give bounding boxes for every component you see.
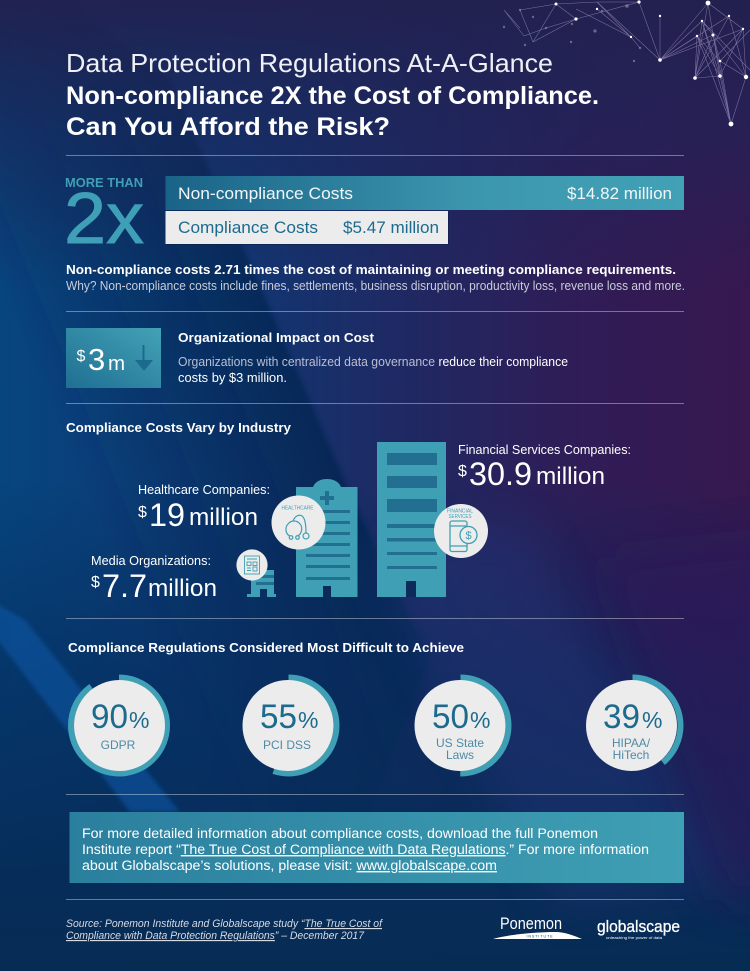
stat: healthcare: Healthcare Companies:	[138, 483, 270, 497]
more than 2x callout: 2x	[64, 179, 144, 259]
icon: financial services	[434, 504, 488, 558]
logo: Ponemon: INSTITUTE	[526, 934, 554, 938]
bar: non-compliance costs: Non-compliance Costs	[178, 185, 353, 203]
gauge: GDPR 90%	[71, 678, 167, 774]
organizational impact text: Organizational Impact on Cost	[178, 330, 375, 345]
call to action panel: Institute report “The True Cost of Compliance with Data Regulations.” For more information	[82, 842, 649, 858]
stat: financial services: $	[458, 463, 467, 480]
source note	[66, 918, 384, 942]
summary text	[66, 262, 685, 293]
organizational impact text	[178, 330, 568, 385]
stat: healthcare: $	[138, 504, 147, 521]
logo: Ponemon	[493, 915, 582, 939]
stat: media: Media Organizations:	[91, 554, 211, 568]
gauge: PCI DSS 55%	[240, 678, 336, 774]
logo: globalscape: unleashing the power of data	[606, 936, 662, 940]
gauge: PCI DSS 55%: 55	[260, 698, 297, 736]
title	[66, 48, 599, 141]
stat: media: $	[91, 574, 100, 591]
bar: compliance costs: $5.47 million	[343, 219, 439, 237]
gauge: US State Laws 50%: Laws	[446, 748, 474, 762]
gauge: US State Laws 50%: 50	[432, 698, 469, 736]
icon: financial services: $	[465, 530, 472, 542]
gauge: US State Laws 50%: US State	[436, 736, 484, 750]
gauge: PCI DSS 55%: %	[298, 707, 318, 733]
bar: compliance costs	[166, 211, 449, 245]
stat: financial services: Financial Services Companies:	[458, 443, 631, 457]
gauge: US State Laws 50%: %	[470, 707, 490, 733]
icon: $3m down: 3	[88, 342, 105, 377]
building: media	[247, 570, 276, 597]
title: Can You Afford the Risk?	[66, 113, 390, 141]
heading: industry: Compliance Costs Vary by Industry	[66, 420, 292, 435]
call to action panel: about Globalscape’s solutions, please visit: www.globalscape.com	[82, 858, 497, 874]
title: Data Protection Regulations At-A-Glance	[66, 48, 553, 78]
gauge: US State Laws 50%	[412, 678, 508, 774]
call to action panel: For more detailed information about compliance costs, download the full Ponemon	[82, 826, 598, 842]
organizational impact text: Organizations with centralized data governance reduce their compliance	[178, 355, 568, 369]
gauge: GDPR 90%: 90	[91, 698, 128, 736]
gauge: HIPAA/HiTech 39%: HiTech	[613, 748, 649, 762]
gauge: GDPR 90%: %	[129, 707, 149, 733]
source note: Source: Ponemon Institute and Globalscape study “The True Cost of	[66, 918, 384, 930]
stat: financial services: 30.9	[469, 456, 532, 492]
source note: Compliance with Data Protection Regulations” – December 2017	[66, 930, 365, 942]
gauge: HIPAA/HiTech 39%: HIPAA/	[612, 736, 651, 750]
icon: $3m down: m	[108, 352, 125, 375]
stat: healthcare: million	[189, 504, 258, 531]
more than 2x callout: MORE THAN	[65, 175, 143, 190]
stat: media: million	[148, 575, 217, 602]
stat: financial services	[458, 443, 631, 492]
summary text: Non-compliance costs 2.71 times the cost of maintaining or meeting compliance requirements.	[66, 262, 676, 277]
icon: $3m down	[66, 328, 161, 388]
stat: media: 7.7	[102, 568, 147, 604]
call to action panel	[70, 812, 684, 883]
gauge: GDPR 90%: GDPR	[101, 738, 136, 752]
bar: non-compliance costs: $14.82 million	[567, 185, 672, 203]
icon: healthcare: HEALTHCARE	[282, 506, 314, 512]
logo: globalscape: globalscape	[597, 917, 680, 936]
gauge: PCI DSS 55%: PCI DSS	[263, 738, 311, 752]
heading: regulations: Compliance Regulations Considered Most Difficult to Achieve	[68, 640, 464, 655]
icon: financial services: FINANCIAL	[447, 508, 473, 514]
gauge: HIPAA/HiTech 39%	[584, 678, 680, 774]
icon: media	[236, 549, 268, 581]
bar: compliance costs: Compliance Costs	[178, 219, 318, 237]
summary text: Why? Non-compliance costs include fines, settlements, business disruption, productivity loss, revenue loss and more.	[66, 279, 685, 293]
stat: healthcare	[138, 483, 270, 533]
icon: financial services: SERVICES	[448, 514, 472, 520]
gauge: HIPAA/HiTech 39%: %	[642, 707, 662, 733]
icon: $3m down: $	[76, 348, 86, 365]
building: financial	[377, 442, 446, 597]
bar: non-compliance costs	[166, 176, 684, 210]
building: healthcare	[296, 479, 358, 597]
logo: Ponemon: Ponemon	[500, 915, 562, 933]
gauge: HIPAA/HiTech 39%: 39	[603, 698, 640, 736]
stat: financial services: million	[536, 463, 605, 490]
stat: media	[91, 554, 217, 604]
stat: healthcare: 19	[149, 497, 185, 533]
icon: healthcare	[272, 496, 326, 550]
organizational impact text: costs by $3 million.	[178, 371, 287, 385]
network graphic	[503, 0, 750, 126]
title: Non-compliance 2X the Cost of Compliance.	[66, 82, 599, 110]
